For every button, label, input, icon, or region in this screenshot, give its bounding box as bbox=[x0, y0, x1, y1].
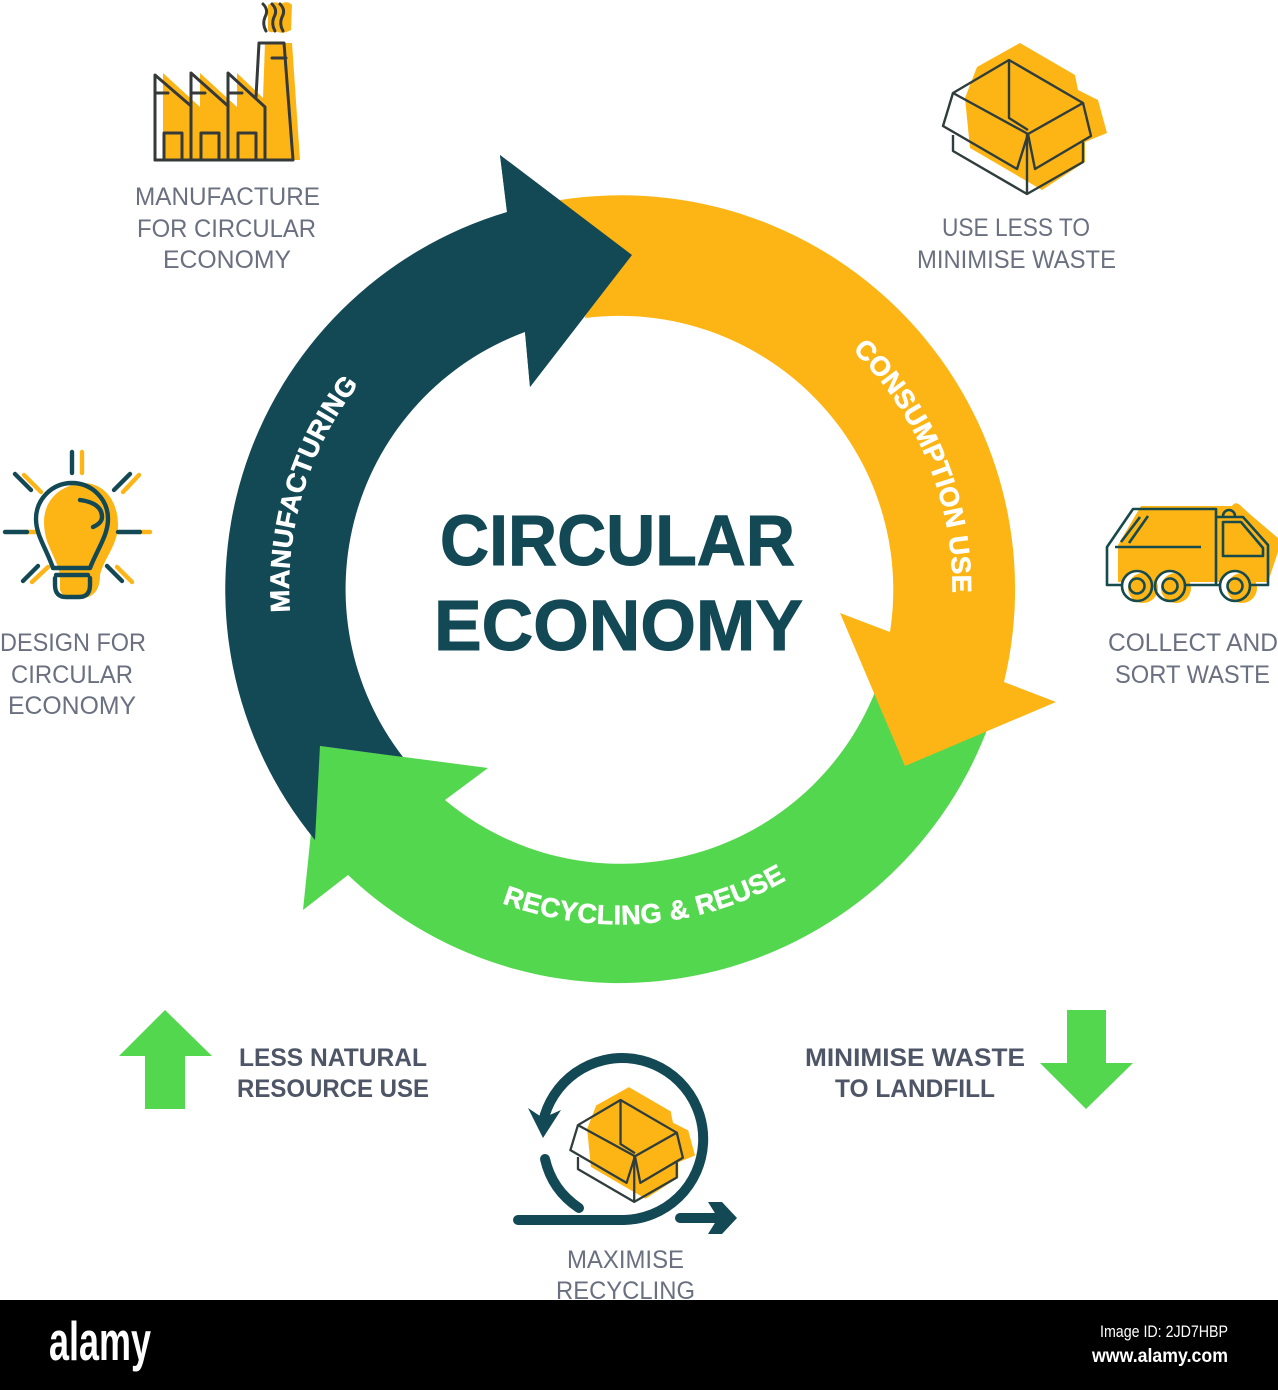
footer logo: alamy bbox=[49, 1310, 151, 1372]
arrow tip overlap: manufacturing head bbox=[500, 155, 632, 387]
text: less natural resource use: LESS NATURAL bbox=[239, 1044, 427, 1072]
title bbox=[434, 502, 803, 666]
segment label: manufacturing: MANUFACTURING bbox=[270, 376, 356, 612]
icon: garbage truck bbox=[1107, 503, 1278, 603]
text: manufacture for circular economy bbox=[135, 183, 320, 274]
text: design for circular economy bbox=[0, 629, 146, 720]
title: ECONOMY bbox=[434, 587, 803, 666]
icon: light bulb bbox=[5, 452, 150, 599]
segment label: recycling and reuse: RECYCLING & REUSE bbox=[503, 864, 786, 925]
text: manufacture for circular economy: ECONOMY bbox=[163, 246, 291, 274]
text: manufacture for circular economy: FOR CIRCULAR bbox=[137, 215, 316, 243]
icon: open box bbox=[943, 43, 1107, 194]
icon: down arrow bbox=[1040, 1010, 1133, 1109]
footer band bbox=[0, 1300, 1278, 1390]
text: maximise recycling: MAXIMISE bbox=[567, 1246, 684, 1274]
text: maximise recycling: RECYCLING bbox=[556, 1277, 695, 1305]
icon: factory bbox=[155, 2, 300, 160]
footer url: www.alamy.com bbox=[1091, 1346, 1228, 1367]
text: manufacture for circular economy: MANUFACTURE bbox=[135, 183, 320, 211]
icon: recycling loop with box bbox=[518, 1058, 737, 1234]
text: collect and sort waste: COLLECT AND bbox=[1108, 629, 1278, 657]
title: CIRCULAR bbox=[440, 502, 795, 581]
arrow segment: consumption use bbox=[560, 195, 1056, 766]
text: minimise waste to landfill: TO LANDFILL bbox=[835, 1075, 995, 1103]
text: collect and sort waste bbox=[1108, 629, 1278, 689]
text: maximise recycling bbox=[556, 1246, 695, 1305]
text: collect and sort waste: SORT WASTE bbox=[1115, 661, 1270, 689]
text: use less to minimise waste: MINIMISE WASTE bbox=[917, 246, 1116, 274]
arrow segment: recycling and reuse bbox=[303, 692, 987, 983]
text: minimise waste to landfill bbox=[805, 1044, 1025, 1103]
text: use less to minimise waste: USE LESS TO bbox=[942, 214, 1090, 242]
text: minimise waste to landfill: MINIMISE WASTE bbox=[805, 1044, 1025, 1072]
text: design for circular economy: ECONOMY bbox=[8, 692, 136, 720]
footer image id: Image ID: 2JD7HBP bbox=[1100, 1322, 1228, 1341]
icon: up arrow bbox=[119, 1010, 212, 1109]
text: use less to minimise waste bbox=[917, 214, 1116, 274]
text: design for circular economy: CIRCULAR bbox=[11, 661, 133, 689]
text: less natural resource use bbox=[237, 1044, 429, 1103]
arrow segment: manufacturing bbox=[225, 155, 632, 840]
text: design for circular economy: DESIGN FOR bbox=[0, 629, 146, 657]
text: less natural resource use: RESOURCE USE bbox=[237, 1075, 429, 1103]
circular arrow cycle diagram bbox=[225, 155, 1056, 984]
segment label: consumption use: CONSUMPTION USE bbox=[856, 340, 972, 592]
